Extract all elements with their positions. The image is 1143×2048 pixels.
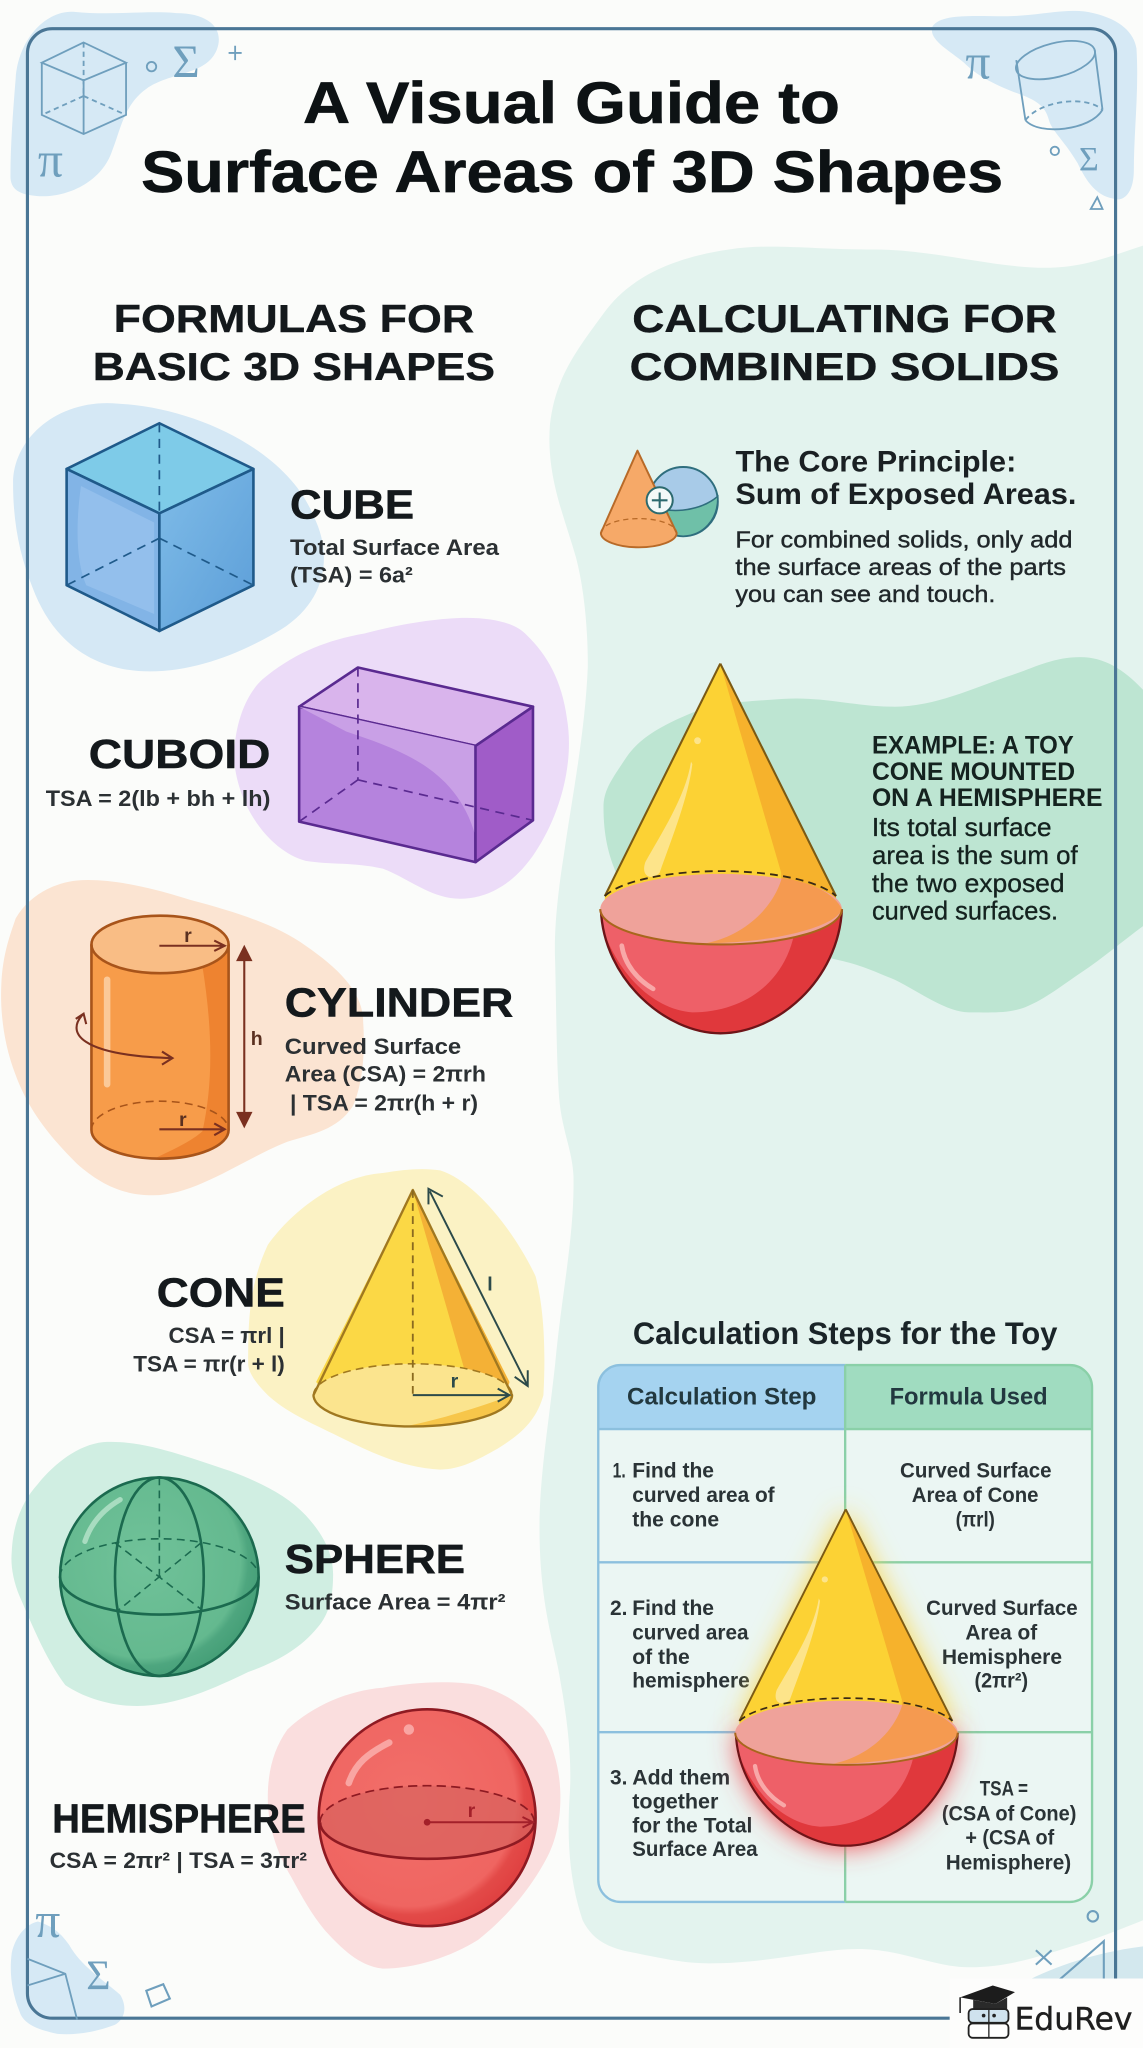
label: cylinder (285, 979, 513, 1115)
label: cuboid: TSA = 2(lb + bh + lh) (46, 786, 270, 811)
decoration: bottom-left math symbols: π (35, 1893, 60, 1948)
icon: cube (67, 423, 253, 631)
table header: calculation step (598, 1365, 845, 1429)
decoration: top-left math symbols (38, 36, 242, 187)
row 1 step: Find the (632, 1459, 714, 1482)
decoration: top-left math symbols: Σ (172, 36, 200, 88)
table: calculation steps (598, 1365, 1092, 1902)
icon: cylinder: h (251, 1028, 263, 1050)
row 2 step: 2. (610, 1597, 627, 1620)
label: hemisphere: HEMISPHERE (52, 1796, 306, 1842)
label: cube: CUBE (290, 482, 414, 528)
icon: cone: l (487, 1274, 493, 1296)
decoration: bottom-left math symbols: Σ (86, 1953, 111, 1999)
text: core principle: the surface areas of the parts (735, 554, 1066, 580)
icon: cone (314, 1189, 528, 1427)
row 1 formula: Curved Surface (900, 1459, 1052, 1482)
decoration: bottom-right math symbols (1036, 1911, 1104, 1980)
title: Surface Areas of 3D Shapes (141, 140, 1003, 205)
decoration: top-right blob (932, 11, 1137, 199)
icon: cylinder: r (179, 1109, 187, 1131)
text: example: CONE MOUNTED (872, 759, 1075, 786)
blob: hemisphere (268, 1682, 560, 1969)
table: calculation steps: Calculation Step (627, 1383, 816, 1410)
row 2 step (610, 1597, 750, 1693)
decoration: top-right math symbols (965, 34, 1103, 209)
text: core principle: you can see and touch. (735, 581, 995, 607)
row 2 formula: Hemisphere (942, 1646, 1062, 1669)
decoration: bottom-right blob (1019, 1946, 1143, 1999)
row 1 formula (900, 1459, 1052, 1532)
icon: graduation cap with book face (960, 1986, 1015, 2038)
row 2 formula: (2πr²) (974, 1670, 1028, 1693)
blob: example highlight (604, 657, 1143, 1012)
row 3 step: 3. (610, 1766, 627, 1789)
row 2 formula: Area of (965, 1621, 1037, 1644)
label: cylinder: Area (CSA) = 2πrh (285, 1062, 486, 1087)
label: cone: TSA = πr(r + l) (133, 1352, 285, 1377)
row 3 formula: + (CSA of (965, 1826, 1054, 1849)
icon: core principle cone and sphere (601, 451, 718, 547)
row 3 step: Add them (632, 1766, 730, 1789)
decoration: bottom-left math symbols (27, 1893, 170, 2020)
text: core principle: The Core Principle: (735, 446, 1016, 479)
heading: calculating for combined solids: CALCULATING FOR (632, 298, 1057, 341)
label: hemisphere: CSA = 2πr² | TSA = 3πr² (50, 1848, 307, 1873)
row 3 step: Surface Area (632, 1838, 758, 1861)
label: cylinder: | TSA = 2πr(h + r) (290, 1090, 478, 1115)
label: cone: CSA = πrl | (169, 1323, 285, 1348)
text: example: area is the sum of (872, 840, 1078, 870)
row 3 step: for the Total (632, 1815, 752, 1838)
row 2 step: curved area (632, 1621, 749, 1644)
row 2 formula (926, 1597, 1078, 1693)
row 2 step: of the (632, 1646, 690, 1669)
row 3 step: together (632, 1791, 718, 1814)
decoration: top-right math symbols: Σ (1079, 141, 1099, 178)
label: sphere (285, 1536, 506, 1614)
decoration: top-left math symbols: π (38, 132, 63, 187)
label: cone (133, 1269, 285, 1377)
row 1 step: 1. (613, 1459, 626, 1482)
text: example (872, 733, 1103, 926)
row 2 step: Find the (632, 1597, 714, 1620)
panel: combined solids background (539, 246, 1143, 1967)
heading: calculating for combined solids: COMBINED SOLIDS (630, 346, 1059, 389)
label: cube: Total Surface Area (290, 535, 500, 560)
label: cone: CONE (157, 1269, 285, 1315)
row 2 step: hemisphere (632, 1670, 750, 1693)
blob: cone (248, 1169, 544, 1470)
table: calculation steps: Formula Used (890, 1383, 1048, 1410)
row 3 formula (942, 1778, 1076, 1874)
blob: cube (13, 403, 324, 671)
icon: cuboid (299, 668, 533, 862)
title (141, 71, 1003, 205)
icon: cylinder (76, 916, 263, 1159)
row 3 formula: Hemisphere) (946, 1851, 1071, 1874)
label: cube (290, 482, 500, 588)
label: sphere: SPHERE (285, 1536, 465, 1582)
blob: cuboid (234, 618, 569, 899)
text: example: EXAMPLE: A TOY (872, 733, 1074, 760)
text: core principle (735, 446, 1076, 607)
text: example: the two exposed (872, 868, 1065, 898)
icon: cone: r (451, 1370, 459, 1392)
icon: sphere (60, 1477, 259, 1676)
text: example: curved surfaces. (872, 896, 1058, 926)
arrows: cylinder dimensions (76, 941, 251, 1135)
arrows: cone dimensions (413, 1189, 528, 1402)
row 1 step: curved area of (632, 1484, 775, 1507)
row 1 step: the cone (632, 1509, 719, 1532)
text: example: Its total surface (872, 812, 1052, 842)
row 2 formula: Curved Surface (926, 1597, 1078, 1620)
icon: cylinder: r (184, 925, 192, 947)
row 3 formula: (CSA of Cone) (942, 1802, 1076, 1825)
decoration: top-right math symbols: π (965, 34, 990, 89)
heading: formulas for basic 3D shapes (93, 298, 495, 389)
heading: calculating for combined solids (630, 298, 1059, 389)
text: example: ON A HEMISPHERE (872, 785, 1103, 812)
decoration: top-left blob (10, 12, 219, 196)
row 1 step (613, 1459, 775, 1532)
label: cylinder: Curved Surface (285, 1034, 461, 1059)
row 1 formula: Area of Cone (912, 1484, 1038, 1507)
heading: formulas for basic 3D shapes: BASIC 3D SHAPES (93, 346, 495, 389)
text: core principle: For combined solids, only add (735, 526, 1072, 552)
decoration: bottom-left blob (11, 1922, 124, 2034)
row 3 step (610, 1766, 758, 1861)
label: cylinder: CYLINDER (285, 979, 513, 1025)
label: cube: (TSA) = 6a² (290, 563, 413, 588)
illustration: glowing toy in table (733, 1509, 958, 1847)
table header: formula used (845, 1365, 1092, 1429)
icon: hemisphere (red sphere) (319, 1709, 536, 1926)
label: hemisphere (50, 1796, 307, 1873)
illustration: toy cone on hemisphere (598, 664, 842, 1033)
logo: EduRev (950, 1979, 1143, 2048)
heading: calculation steps: Calculation Steps for the Toy (633, 1316, 1058, 1351)
heading: formulas for basic 3D shapes: FORMULAS FOR (114, 298, 474, 341)
blob: cylinder (1, 880, 364, 1195)
label: cuboid: CUBOID (89, 731, 270, 777)
logo: EduRev: EduRev (1014, 2002, 1133, 2038)
icon: hemisphere (red sphere): r (468, 1800, 476, 1822)
label: cuboid (46, 731, 270, 811)
row 1 formula: (πrl) (956, 1509, 995, 1532)
label: sphere: Surface Area = 4πr² (285, 1589, 506, 1614)
title: A Visual Guide to (303, 71, 840, 136)
blob: sphere (11, 1442, 333, 1706)
text: core principle: Sum of Exposed Areas. (735, 478, 1076, 511)
row 3 formula: TSA = (980, 1778, 1028, 1801)
